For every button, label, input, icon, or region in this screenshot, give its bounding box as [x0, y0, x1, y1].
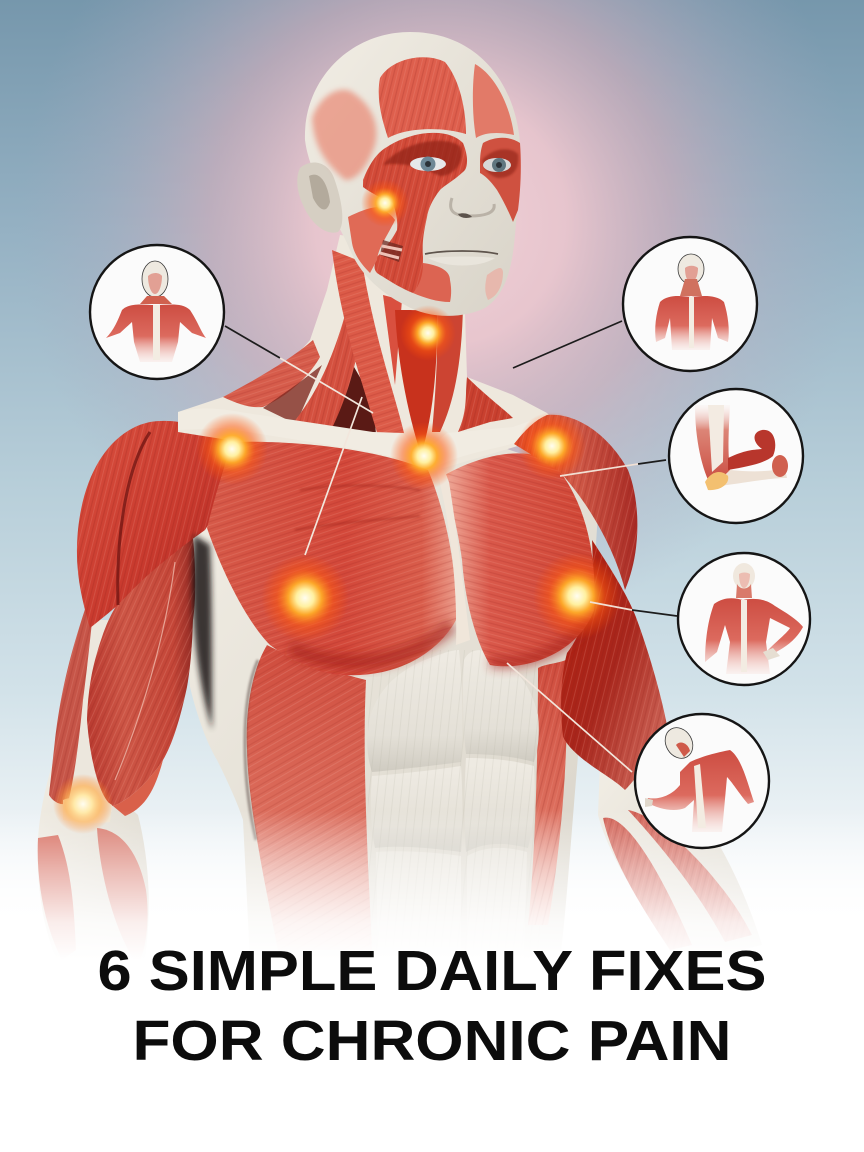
right deltoid [514, 415, 637, 590]
bottom white fade [0, 810, 864, 960]
left outer arm [49, 600, 92, 804]
eye socket shadow left [383, 141, 462, 176]
cheek muscle right [480, 138, 521, 222]
lip shade [428, 256, 495, 266]
neck straps [293, 250, 513, 455]
left elbow bone [63, 797, 112, 823]
right pectoral [445, 453, 595, 666]
mouth [425, 251, 498, 254]
torso base [189, 420, 600, 960]
inset circle: front torso, upper right [623, 237, 757, 371]
cheek muscle left [363, 133, 467, 293]
right chin tint [485, 268, 503, 300]
temple muscle [312, 90, 376, 180]
title: 6 SIMPLE DAILY FIXES [98, 939, 766, 1003]
eye right [483, 158, 511, 172]
clavicles [178, 409, 562, 470]
left deltoid [77, 421, 230, 628]
right oblique [528, 660, 567, 925]
left oblique [245, 645, 372, 950]
deep neck gap [323, 360, 376, 434]
eye left [410, 157, 446, 171]
head [297, 32, 521, 316]
eye socket shadow right [482, 149, 518, 178]
left arm inner strip [66, 620, 120, 812]
chin muscle [413, 263, 451, 302]
left pectoral [207, 442, 456, 675]
inset circle: hand on hip [678, 553, 810, 685]
forehead muscle left [379, 57, 466, 138]
leader lines [225, 321, 677, 772]
forehead muscle right [473, 64, 514, 138]
title [98, 939, 766, 1073]
pain glows [53, 179, 621, 834]
sternum [436, 468, 470, 645]
inset circle: front torso, upper left [90, 245, 224, 379]
inset circle: bent elbow [669, 389, 803, 523]
right upper arm [561, 540, 667, 790]
anatomical muscle figure [38, 32, 762, 985]
left forearm [38, 740, 149, 985]
ear [297, 163, 342, 233]
jaw gap [380, 240, 403, 262]
left bicep [87, 538, 195, 816]
armpit shadow [192, 535, 212, 730]
right forearm [598, 760, 762, 965]
jaw gap strands [380, 246, 402, 258]
nose [451, 198, 494, 216]
skull and face [305, 32, 521, 316]
left trapezius [223, 340, 322, 424]
title: FOR CHRONIC PAIN [132, 1009, 732, 1073]
jaw strip muscle [348, 207, 395, 273]
inset circle: leaning figure [635, 714, 769, 848]
nostril [458, 213, 472, 218]
abdominal muscles [367, 650, 540, 960]
neck and shoulder base [178, 235, 565, 472]
